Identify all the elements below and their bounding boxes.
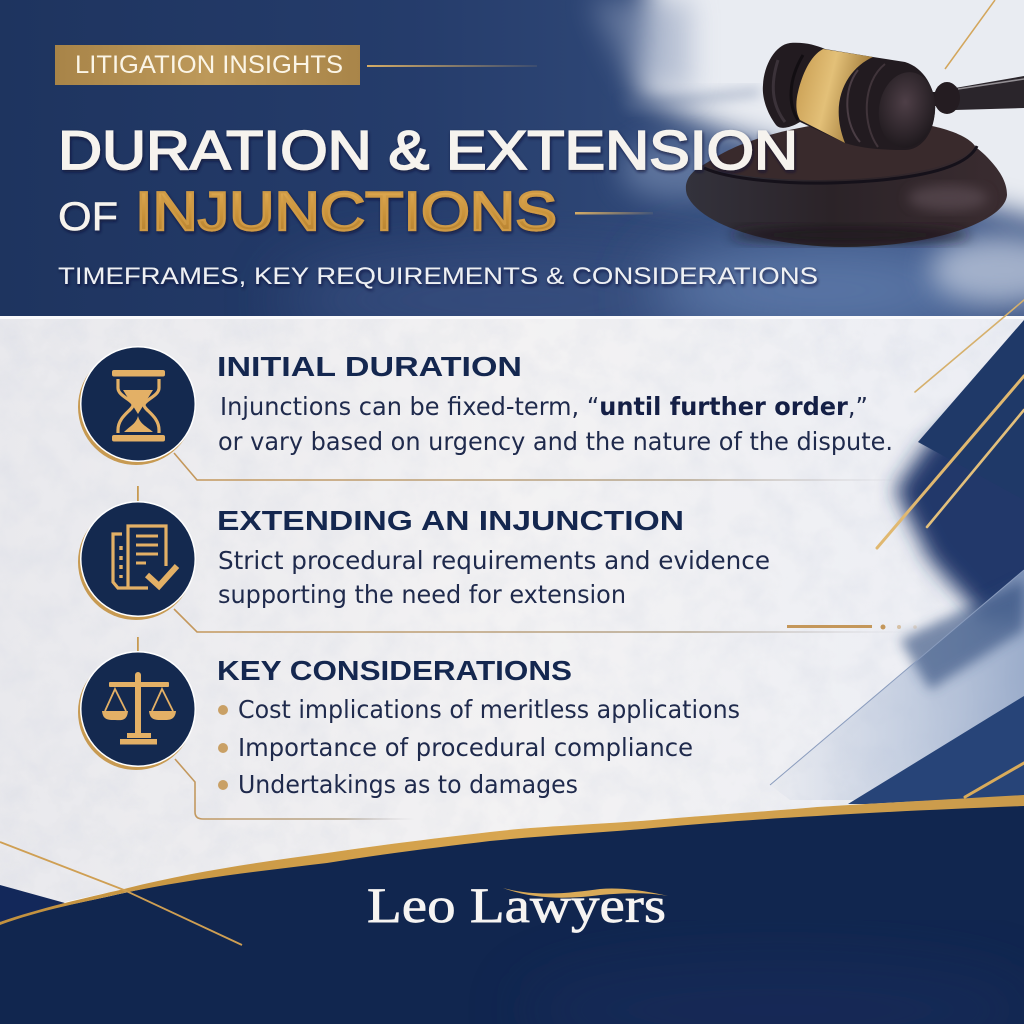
connector line (175, 759, 415, 819)
icon: document with check (78, 501, 196, 620)
gavel handle (930, 76, 1024, 114)
badge: litigation insights (55, 45, 360, 85)
body text: supporting the need for extension (218, 580, 626, 609)
title: INJUNCTIONS (135, 180, 557, 242)
gold swoosh (0, 795, 1024, 925)
badge: litigation insights: LITIGATION INSIGHTS (75, 51, 343, 79)
gold dash with dots (787, 624, 917, 630)
vertical tick 2 (137, 637, 139, 653)
bullet 2: Importance of procedural compliance (238, 733, 693, 762)
logo: leo lawyers: Leo Lawyers (367, 877, 666, 933)
heading: INITIAL DURATION (217, 351, 522, 382)
bullet list (218, 695, 740, 799)
bullet 3: Undertakings as to damages (238, 770, 578, 799)
title (58, 119, 798, 242)
title: OF (58, 195, 118, 239)
subtitle: TIMEFRAMES, KEY REQUIREMENTS & CONSIDERATIONS (58, 263, 818, 290)
gold accent lines: right (877, 300, 1024, 797)
connector line (174, 609, 910, 632)
title: DURATION & EXTENSION (58, 119, 798, 181)
heading: EXTENDING AN INJUNCTION (217, 505, 684, 536)
gold accent line: top right (945, 0, 995, 69)
body text: Injunctions can be fixed-term, “until further order,” (220, 392, 868, 421)
icon: scales of justice (78, 651, 196, 770)
right side blue graphic (770, 320, 1024, 804)
panel: initial duration (78, 346, 910, 480)
body text (218, 392, 893, 456)
panel: key considerations (78, 651, 740, 819)
bullet 1: Cost implications of meritless applications (238, 695, 740, 724)
gavel sound block (686, 120, 1007, 247)
panel: extending an injunction (78, 501, 917, 632)
footer band (0, 805, 1024, 1024)
gold crossing line (0, 842, 242, 945)
icon: hourglass (78, 346, 196, 465)
logo swoosh (503, 888, 668, 898)
badge rule (367, 65, 537, 67)
body text (218, 546, 770, 609)
body text: Strict procedural requirements and evidence (218, 546, 770, 575)
body text: or vary based on urgency and the nature of the dispute. (218, 427, 893, 456)
gavel head (763, 43, 940, 152)
vertical tick 1 (137, 486, 139, 502)
title rule (575, 212, 653, 214)
heading: KEY CONSIDERATIONS (217, 655, 572, 686)
header background (0, 0, 1024, 350)
gavel (686, 43, 1024, 247)
panel: body background (0, 316, 1024, 936)
connector line (174, 453, 910, 480)
